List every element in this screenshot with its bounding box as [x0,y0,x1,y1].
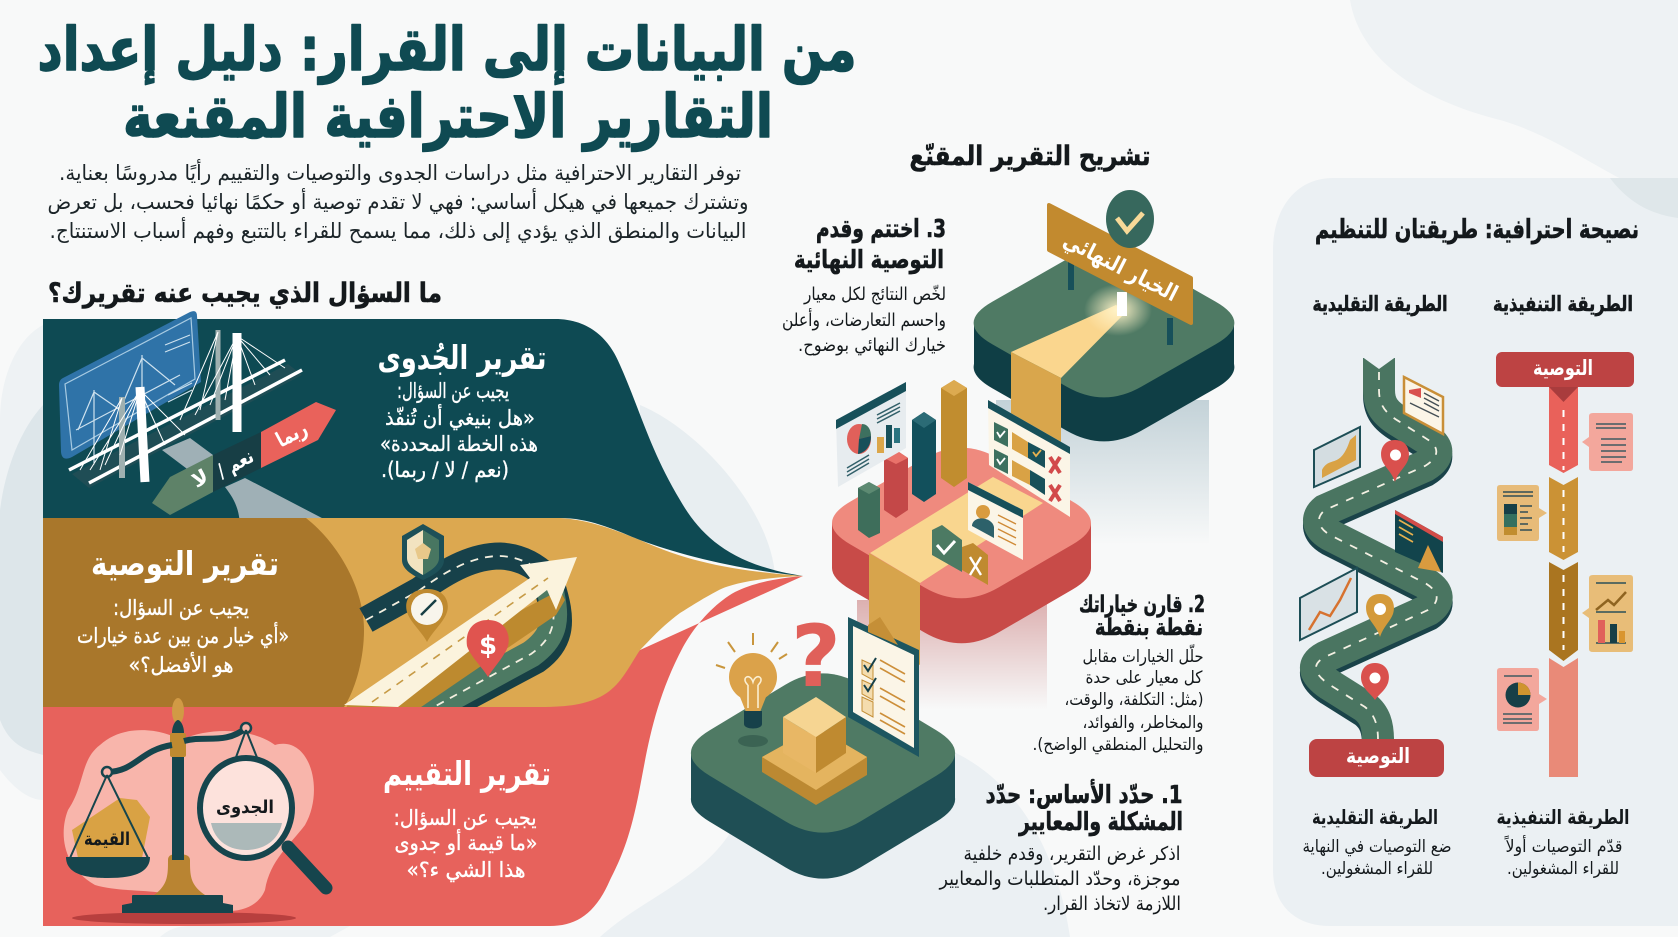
dark road [366,556,548,620]
pink blob [64,730,314,911]
title [38,15,856,152]
executive caption [1496,805,1630,879]
traditional caption: ضع التوصيات في النهاية [1302,837,1452,857]
text: evaluation report: تقرير التقييم [383,754,551,794]
shadows below platforms [857,400,1209,710]
text: recommendation report: يجيب عن السؤال: [113,596,249,620]
intro paragraph: وتشترك جميعها في هيكل أساسي: فهي لا تقدم توصية أو حكمًا نهائيا فحسب، بل تعرض [48,188,748,214]
step 2 text: حلّل الخيارات مقابل [1082,643,1204,667]
band: evaluation [43,576,803,926]
step 2 text: (مثل: التكلفة، والوقت، [1064,690,1204,710]
board: line chart [1300,568,1357,640]
growth arrow [346,594,565,707]
title: التقارير الاحترافية المقنعة [123,82,773,152]
step 1 text: اذكر غرض التقرير، وقدم خلفية [964,843,1180,865]
text: recommendation report: «أي خيار من بين عدة خيارات [77,622,289,648]
sign arrow: ربما [272,416,311,452]
platform: step 2 [832,380,1091,665]
step 3 text: 3. اختتم وقدم [816,214,946,244]
step 3 text: التوصية النهائية [794,245,944,275]
recommendation banner: التوصية [1533,356,1593,380]
text: recommendation report: تقرير التوصية [91,544,279,584]
magnifier: الجدوى [216,797,274,818]
platform: step 3 [974,190,1234,460]
cross block [962,543,988,585]
bar chart [858,380,967,538]
bulb [716,633,787,747]
doc: text list [1582,413,1633,471]
sign arrow: نعم / [213,444,257,483]
recommendation badge [1309,739,1444,777]
sign: الخيار النهائي [1059,228,1182,307]
step 2 text: نقطة بنقطة [1095,615,1203,641]
heading: anatomy: تشريح التقرير المقنّع [910,141,1150,172]
executive path [1496,352,1634,777]
board: dark [1395,510,1443,573]
left pan [66,775,150,878]
board: report [1404,377,1443,434]
illustration: scale and magnifier [64,698,326,924]
pin: red [1381,440,1409,482]
step 2 text: والمخاطر، والفوائد، [1082,713,1204,733]
sign arrow: لا [187,464,213,493]
step 1 text: موجزة، وحدّد المتطلبات والمعايير [939,868,1180,890]
bridge [69,330,302,488]
beam [107,728,246,772]
traditional caption [1302,805,1452,879]
text: feasibility report: هذه الخطة المحددة» [380,432,538,456]
step 2 text: والتحليل المنطقي الواضح). [1032,735,1204,755]
column heading: executive: الطريقة التنفيذية [1493,292,1633,316]
step 1 text: اللازمة لاتخاذ القرار. [1043,893,1181,915]
intro paragraph [48,159,748,244]
executive caption: الطريقة التنفيذية [1496,805,1630,829]
traditional winding road [1300,350,1444,777]
intro paragraph: توفر التقارير الاحترافية مثل دراسات الجدوى والتوصيات والتقييم رأيًا مدروسًا بعناية. [59,159,741,186]
column heading: traditional: الطريقة التقليدية [1312,292,1448,316]
heading: question: ما السؤال الذي يجيب عنه تقريرك؟ [48,278,442,309]
doc: chart [1582,575,1633,652]
step 1 text [939,779,1183,915]
board: area chart [1314,427,1360,487]
left pan: القيمة [84,829,130,850]
base [122,895,233,913]
shadow [72,912,296,924]
step 3 text [782,214,946,356]
executive caption: للقراء المشغولين. [1507,859,1619,879]
intro paragraph: البيانات والمنطق الذي يؤدي إلى ذلك، مما يسمح للقراء بالتتبع وفهم أسباب الاستنتاج. [50,217,746,244]
sign [1049,205,1191,323]
gauge pin [406,589,448,642]
executive caption: قدّم التوصيات أولاً [1504,835,1622,857]
check badge [1106,190,1154,248]
step 3 text: واحسم التعارضات، وأعلن [782,308,946,331]
illustration: roads and arrow [344,524,577,722]
roads [162,438,322,518]
text: evaluation report: يجيب عن السؤال: [394,806,537,830]
recommendation badge: التوصية [1346,744,1410,768]
step 1 text: المشكلة والمعايير [1017,807,1183,837]
post [172,735,184,860]
band: recommendation [43,518,803,707]
text: recommendation report [77,544,289,677]
text: feasibility report: «هل بنيغي أن تُنفّذ [385,404,535,430]
text: feasibility report: تقرير الجُدوى [378,338,546,378]
doc: table [1497,485,1547,541]
dollar pin [467,620,509,677]
text: evaluation report: «ما قيمة أو جدوى [394,829,538,855]
checklist screen [988,400,1070,517]
pin: gold [1366,594,1394,637]
recommendation text panel [43,518,364,707]
traditional caption: للقراء المشغولين. [1321,859,1433,879]
doc: pie [1497,668,1547,731]
chart screen [836,382,906,487]
text: feasibility report: يجيب عن السؤال: [397,379,509,403]
dollar pin: $ [479,631,497,661]
posts [1071,258,1170,345]
text: recommendation report: هو الأفضل؟» [128,652,234,677]
traditional caption: الطريقة التقليدية [1312,805,1438,829]
step 3 text: خيارك النهائي بوضوح. [798,335,946,356]
step 1 text: 1. حدّد الأساس: حدّد [985,779,1182,809]
check block [932,525,962,572]
platform: step 1 [691,607,955,879]
person card [968,482,1023,560]
ribbon [870,477,1043,583]
step 2 text: كل معيار على حدة [1086,668,1203,688]
blueprint [59,311,201,465]
shield [402,524,444,580]
glowing ribbon [1011,305,1126,378]
illustration: bridge and decision sign [59,311,345,530]
text: feasibility report: (نعم / لا / ربما). [381,458,509,483]
box [762,697,867,805]
magnifier [200,730,326,888]
text: feasibility report [378,338,546,483]
panel: report types funnel [43,319,803,926]
clipboard [848,617,919,757]
step 2 text [1032,592,1205,755]
text: evaluation report [383,754,551,882]
question mark: ? [791,607,841,707]
recommendation banner [1496,352,1634,402]
band: feasibility [43,319,803,576]
step 2 text: 2. قارن خياراتك [1079,592,1205,618]
sign arrow [152,402,336,515]
title: من البيانات إلى القرار: دليل إعداد [38,15,856,85]
pin: red lower [1361,663,1389,700]
step 3 text: لخّص النتائج لكل معيار [803,284,946,305]
green road [462,585,572,707]
text: evaluation report: هذا الشي ء؟» [406,858,526,882]
panel: pro tip [1273,178,1678,926]
